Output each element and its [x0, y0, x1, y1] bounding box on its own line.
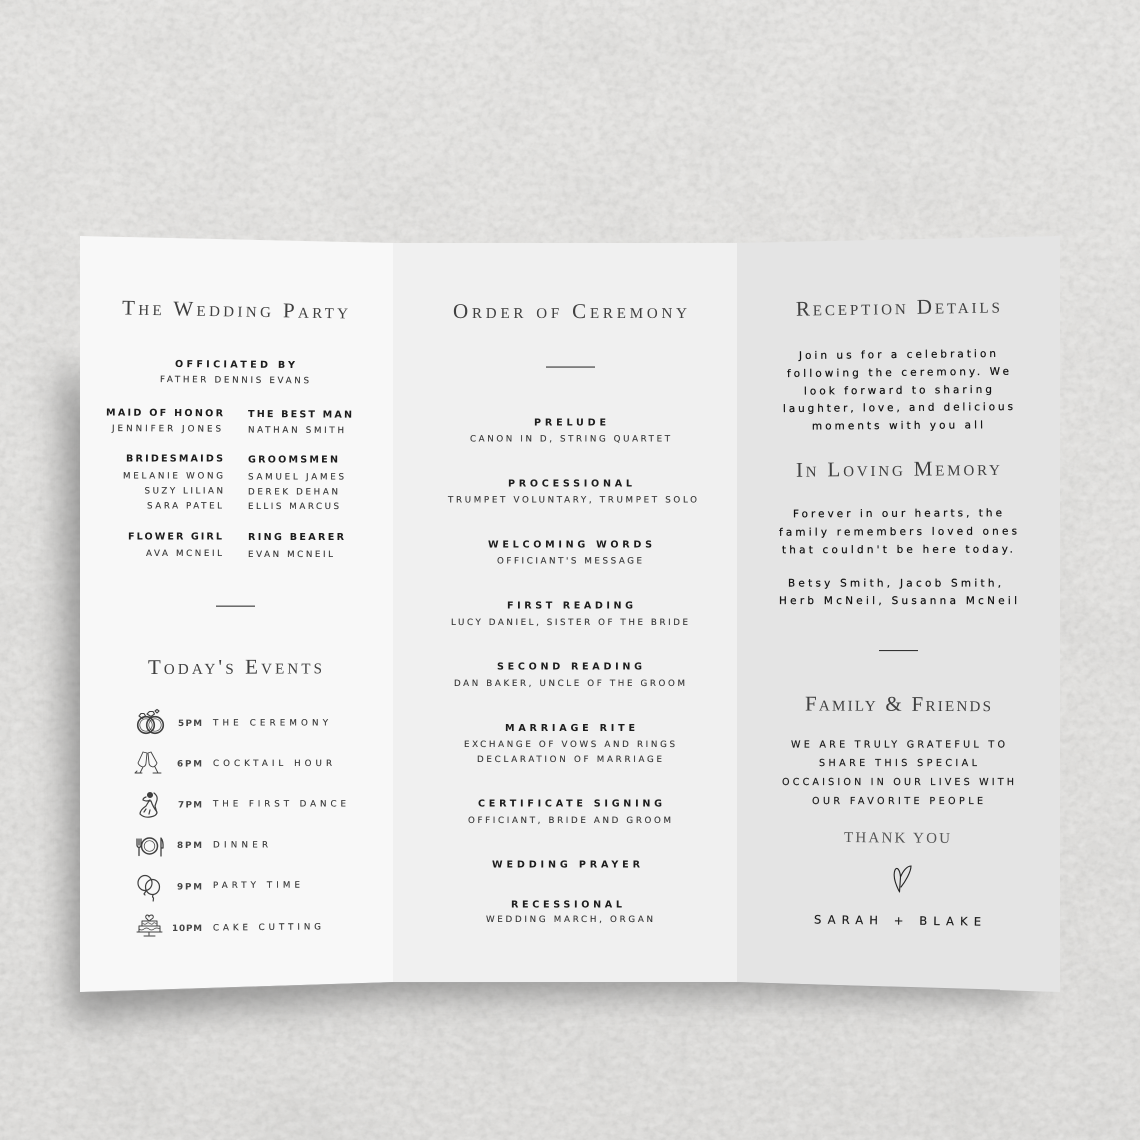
item: recessional	[486, 900, 653, 925]
heading: reception details: Reception Details	[796, 293, 1000, 321]
reception paragraph: following the ceremony. We	[787, 366, 1009, 380]
maid of honor and best man: NATHAN SMITH	[248, 426, 344, 436]
panel: middle	[393, 243, 737, 982]
event: party time: PARTY TIME	[213, 881, 300, 891]
reception paragraph: Join us for a celebration	[798, 348, 996, 362]
maid of honor and best man: JENNIFER JONES	[111, 424, 222, 435]
item: welcoming words: WELCOMING WORDS	[488, 540, 652, 551]
panel: right	[737, 236, 1060, 992]
heading: order of ceremony: Order of Ceremony	[453, 299, 687, 323]
icon: dancing couple	[140, 792, 157, 817]
item: processional: PROCESSIONAL	[508, 479, 632, 490]
paper bottom edge	[80, 982, 1000, 992]
bridesmaids and groomsmen: MELANIE WONG	[123, 472, 223, 482]
event: ceremony: 5PM	[178, 719, 202, 729]
item: second reading	[454, 662, 685, 689]
item: processional: TRUMPET VOLUNTARY, TRUMPET SOLO	[447, 496, 697, 506]
item: second reading: DAN BAKER, UNCLE OF THE GROOM	[454, 679, 685, 689]
reception paragraph: look forward to sharing	[804, 384, 992, 397]
item: first reading: LUCY DANIEL, SISTER OF THE BRIDE	[451, 618, 688, 628]
flower girl and ring bearer: EVAN MCNEIL	[248, 550, 333, 560]
item: recessional: RECESSIONAL	[511, 900, 622, 910]
brochure drop shadow	[62, 370, 1030, 1018]
bridesmaids and groomsmen: SUZY LILIAN	[144, 486, 223, 496]
maid of honor and best man: THE BEST MAN	[248, 409, 352, 421]
reception paragraph: laughter, love, and delicious	[783, 401, 1013, 415]
item: certificate signing: CERTIFICATE SIGNING	[478, 798, 662, 810]
icon: balloons	[138, 876, 160, 901]
event: party time: 9PM	[177, 882, 202, 892]
bridesmaids and groomsmen: DEREK DEHAN	[248, 488, 338, 498]
heading: in loving memory: In Loving Memory	[796, 456, 1000, 482]
event: first dance	[140, 792, 346, 817]
item: marriage rite: DECLARATION OF MARRIAGE	[477, 755, 662, 765]
event: cocktail hour: 6PM	[177, 760, 202, 770]
bridesmaids and groomsmen: SARA PATEL	[147, 502, 222, 512]
event: dinner	[137, 838, 268, 856]
bridesmaids and groomsmen: GROOMSMEN	[248, 454, 338, 466]
item: welcoming words	[488, 540, 652, 567]
event: cake cutting: CAKE CUTTING	[213, 922, 321, 933]
item: certificate signing	[468, 798, 671, 826]
officiant block: OFFICIATED BY	[175, 359, 296, 371]
maid of honor and best man: MAID OF HONOR	[106, 408, 224, 419]
memorial names: Betsy Smith, Jacob Smith,	[788, 578, 1001, 590]
event: cocktail hour: COCKTAIL HOUR	[213, 759, 332, 769]
event: dinner: DINNER	[213, 840, 268, 850]
memorial paragraph: that couldn't be here today.	[782, 543, 1013, 556]
item: wedding prayer: WEDDING PRAYER	[492, 860, 641, 870]
event: party time	[138, 876, 300, 901]
bridesmaids and groomsmen: BRIDESMAIDS	[126, 454, 223, 464]
icon: champagne flutes	[135, 752, 161, 773]
gratitude paragraph	[782, 740, 1014, 807]
item: first reading: FIRST READING	[507, 601, 633, 612]
gratitude paragraph: WE ARE TRULY GRATEFUL TO	[791, 740, 1005, 750]
bridesmaids and groomsmen	[123, 454, 344, 512]
gratitude paragraph: SHARE THIS SPECIAL	[819, 758, 978, 769]
event: first dance: 7PM	[178, 800, 202, 810]
item: prelude	[470, 418, 671, 444]
couple names: SARAH + BLAKE	[814, 913, 981, 929]
icon: hand-drawn heart	[894, 866, 911, 892]
gratitude paragraph: OCCAISION IN OUR LIVES WITH	[782, 777, 1014, 788]
event: ceremony	[138, 710, 329, 733]
item: marriage rite: EXCHANGE OF VOWS AND RINGS	[464, 740, 675, 750]
bridesmaids and groomsmen: SAMUEL JAMES	[248, 472, 344, 482]
bridesmaids and groomsmen: ELLIS MARCUS	[248, 502, 339, 512]
memorial names	[779, 578, 1017, 607]
memorial paragraph	[779, 507, 1017, 556]
panel content: order of ceremony	[447, 299, 697, 925]
item: second reading: SECOND READING	[497, 662, 642, 673]
event: first dance: THE FIRST DANCE	[212, 800, 346, 810]
panel: left	[80, 236, 393, 992]
item: recessional: WEDDING MARCH, ORGAN	[486, 915, 653, 925]
maid of honor and best man	[106, 408, 352, 436]
heading: the wedding party: The Wedding Party	[122, 296, 348, 323]
icon: plate and cutlery	[137, 838, 163, 856]
officiant block: FATHER DENNIS EVANS	[160, 375, 310, 386]
panel content: the wedding party and events	[106, 296, 352, 936]
memorial names: Herb McNeil, Susanna McNeil	[779, 595, 1017, 607]
flower girl and ring bearer: FLOWER GIRL	[128, 532, 222, 542]
item: prelude: CANON IN D, STRING QUARTET	[470, 434, 671, 444]
trifold brochure	[80, 236, 1060, 992]
item: certificate signing: OFFICIANT, BRIDE AND GROOM	[468, 816, 671, 826]
flower girl and ring bearer: RING BEARER	[248, 532, 345, 543]
icon: wedding cake	[137, 915, 162, 936]
memorial paragraph: family remembers loved ones	[779, 525, 1017, 539]
flower girl and ring bearer	[128, 532, 345, 560]
memorial paragraph: Forever in our hearts, the	[793, 507, 1002, 520]
event: dinner: 8PM	[177, 841, 202, 851]
thank you: THANK YOU	[844, 830, 950, 847]
panel content: reception, memory, thanks	[779, 293, 1017, 929]
item: welcoming words: OFFICIANT'S MESSAGE	[497, 557, 642, 567]
gratitude paragraph: OUR FAVORITE PEOPLE	[812, 796, 983, 807]
item: marriage rite	[464, 723, 675, 765]
item: prelude: PRELUDE	[534, 418, 606, 429]
item: processional	[447, 479, 697, 506]
reception paragraph: moments with you all	[812, 419, 983, 432]
item: first reading	[451, 601, 688, 628]
officiant block	[160, 359, 310, 386]
event: cake cutting	[137, 915, 321, 936]
heading: today's events: Today's Events	[148, 654, 322, 679]
event: cocktail hour	[135, 752, 332, 773]
icon: wedding rings	[138, 710, 163, 733]
event: ceremony: THE CEREMONY	[212, 718, 329, 728]
event: cake cutting: 10PM	[172, 924, 202, 934]
heading: family and friends: Family & Friends	[805, 692, 991, 716]
reception paragraph	[783, 348, 1013, 432]
flower girl and ring bearer: AVA MCNEIL	[146, 549, 222, 559]
item: marriage rite: MARRIAGE RITE	[505, 723, 635, 734]
